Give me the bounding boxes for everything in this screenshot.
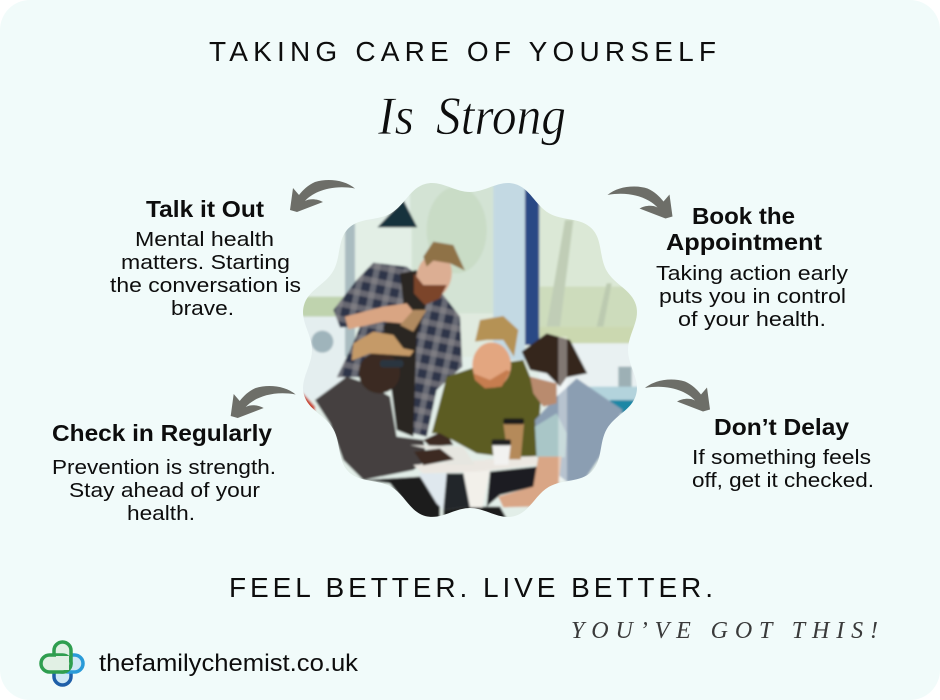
script tagline: YOU’VE GOT THIS! [571, 618, 878, 644]
text block: Check in Regularly [52, 420, 276, 525]
text block: Check in Regularly: Prevention is strength. [52, 456, 276, 479]
text block: Book the Appointment: puts you in control [659, 285, 846, 308]
standing man in plaid shirt [333, 242, 465, 437]
closing heading: FEEL BETTER. LIVE BETTER. [229, 572, 713, 603]
text block: Book the Appointment: Taking action early [656, 262, 849, 285]
text block: Don't Delay: Don’t Delay [714, 414, 849, 440]
text block: Talk it Out: the conversation is [110, 274, 301, 297]
text block: Talk it Out: brave. [171, 297, 234, 320]
floor and table base shadows [418, 467, 537, 518]
text block: Talk it Out: Mental health [135, 228, 274, 251]
text block: Talk it Out: Talk it Out [146, 196, 264, 222]
text block: Book the Appointment: Book the [692, 203, 795, 229]
text block: Talk it Out [110, 196, 301, 320]
title: TAKING CARE OF YOURSELF [209, 36, 716, 67]
text block: Don't Delay: If something feels [692, 446, 871, 469]
man in denim vest [498, 333, 623, 507]
seated man with tan cap [315, 332, 453, 518]
table with cups and tablet [410, 418, 537, 507]
arrow: to Talk it Out [290, 180, 355, 212]
central scalloped photo of four men around a table [303, 183, 637, 517]
text block: Check in Regularly: Check in Regularly [52, 420, 272, 446]
text block: Talk it Out: matters. Starting [121, 251, 290, 274]
script subtitle: Is [377, 86, 414, 146]
arrow: to Don't Delay [645, 380, 710, 412]
photo background: windows and pillars [303, 183, 637, 517]
script subtitle [377, 86, 566, 146]
arrow: to Book the Appointment [608, 187, 672, 218]
text block: Book the Appointment: Appointment [666, 229, 822, 255]
text block: Don't Delay: off, get it checked. [692, 469, 874, 492]
arrow: to Check in Regularly [231, 386, 296, 418]
man in olive sweater [432, 316, 541, 457]
text block: Check in Regularly: health. [127, 502, 195, 525]
website address: thefamilychemist.co.uk [99, 650, 359, 677]
text block: Book the Appointment: of your health. [678, 308, 826, 331]
script subtitle: Strong [436, 86, 566, 146]
text block: Book the Appointment [656, 203, 849, 331]
icon: family chemist logo [41, 642, 83, 685]
text block: Don't Delay [692, 414, 874, 492]
text block: Check in Regularly: Stay ahead of your [69, 479, 260, 502]
